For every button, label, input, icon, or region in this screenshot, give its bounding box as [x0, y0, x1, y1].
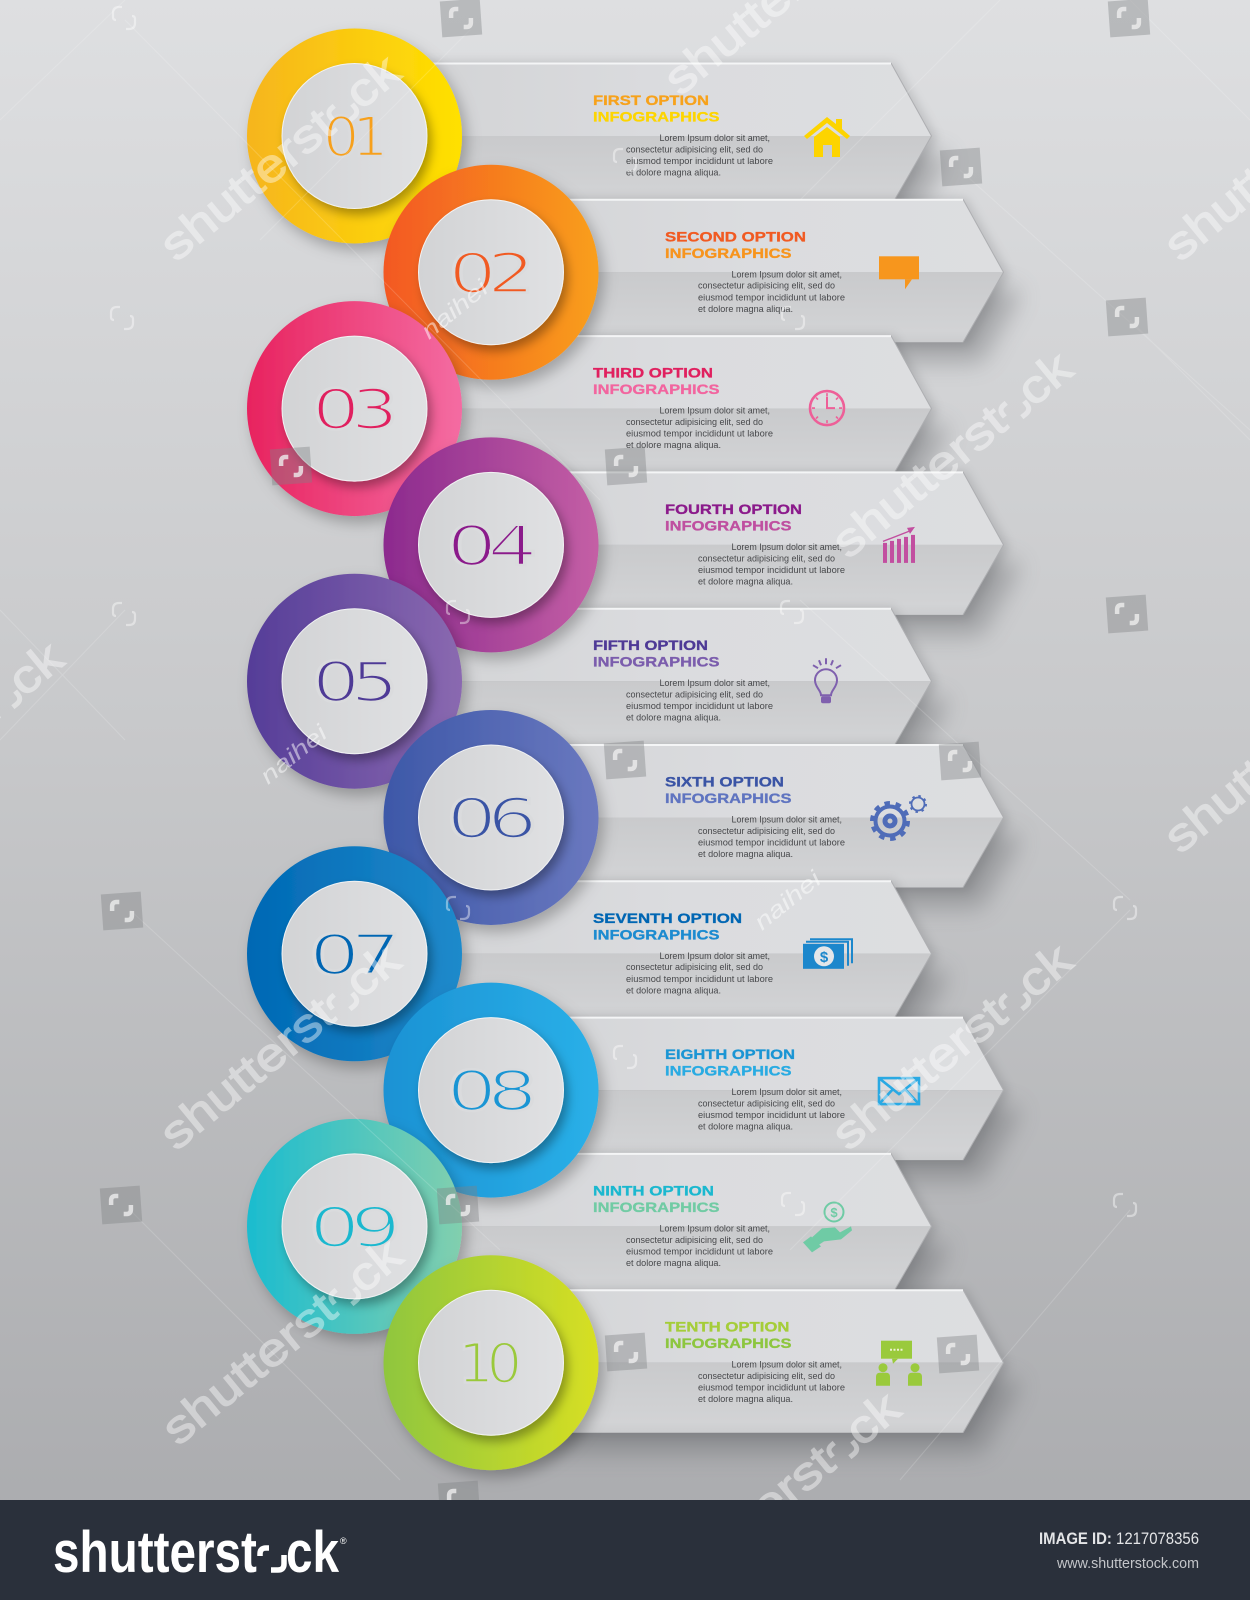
text block: option 4: consectetur adipisicing elit, sed do [698, 553, 835, 564]
badge: 07: 07 [309, 923, 395, 987]
text block: option 3: Lorem Ipsum dolor sit amet, [660, 406, 770, 417]
text block: option 3: et dolore magna aliqua. [626, 440, 721, 451]
watermark pattern: shutterstock [821, 340, 1082, 568]
badge: 01: 01 [323, 105, 383, 169]
text block: option 1 [626, 133, 773, 178]
text block: option 5: eiusmod tempor incididunt ut labore [626, 701, 773, 712]
watermark pattern: naihei [416, 274, 494, 344]
text block: option 8: et dolore magna aliqua. [698, 1122, 793, 1133]
text block: option 7: Lorem Ipsum dolor sit amet, [660, 951, 770, 962]
panel: option 8 arrow [502, 1016, 1021, 1180]
heading: option 1: FIRST OPTION [593, 93, 709, 108]
text block: option 9: consectetur adipisicing elit, sed do [626, 1235, 763, 1246]
icon: banknotes [803, 939, 852, 969]
heading: option 3 [593, 366, 720, 397]
heading: option 9: INFOGRAPHICS [593, 1200, 720, 1215]
text block: option 10: et dolore magna aliqua. [698, 1394, 793, 1405]
text block: option 3: consectetur adipisicing elit, sed do [626, 417, 763, 428]
text block: option 6: eiusmod tempor incididunt ut labore [698, 838, 845, 848]
text block: option 9: et dolore magna aliqua. [626, 1258, 721, 1269]
text block: option 3: eiusmod tempor incididunt ut labore [626, 429, 773, 440]
heading: option 7 [593, 911, 742, 942]
heading: option 8: EIGHTH OPTION [665, 1047, 795, 1062]
watermark pattern: shutterstock [149, 43, 410, 271]
heading: option 7: INFOGRAPHICS [593, 927, 720, 942]
icon: gears [872, 796, 926, 839]
text block: option 4 [698, 542, 845, 587]
text block: option 8: consectetur adipisicing elit, sed do [698, 1098, 835, 1109]
icon: hand with coin [803, 1202, 852, 1252]
text block: option 7: consectetur adipisicing elit, sed do [626, 962, 763, 973]
heading: option 9 [593, 1183, 720, 1215]
watermark pattern: naihei [255, 719, 333, 789]
footer image id and url [1039, 1530, 1199, 1572]
heading: option 4 [665, 502, 802, 533]
badge: 03 [247, 301, 462, 516]
text block: option 2: et dolore magna aliqua. [698, 304, 793, 315]
heading: option 6 [665, 774, 792, 806]
heading: option 1: INFOGRAPHICS [593, 110, 720, 124]
badge: 06 [384, 710, 598, 925]
heading: option 5: FIFTH OPTION [593, 638, 708, 653]
icon: hand with coin: $ [830, 1205, 838, 1220]
text block: option 9: Lorem Ipsum dolor sit amet, [660, 1223, 770, 1234]
heading: option 3: THIRD OPTION [593, 366, 713, 381]
badge: 09 [247, 1119, 462, 1334]
heading: option 1 [593, 93, 720, 124]
text block: option 10: Lorem Ipsum dolor sit amet, [732, 1360, 842, 1371]
icon: envelope [879, 1078, 919, 1104]
watermark pattern: shutterstock [149, 932, 410, 1160]
badge: 01 [247, 28, 462, 244]
icon: banknotes: $ [820, 949, 829, 966]
panel: option 7 arrow [430, 880, 949, 1044]
text block: option 4: eiusmod tempor incididunt ut labore [698, 565, 845, 576]
text block: option 5: consectetur adipisicing elit, sed do [626, 690, 763, 701]
heading: option 9: NINTH OPTION [593, 1183, 714, 1198]
heading: option 6: INFOGRAPHICS [665, 791, 792, 806]
text block: option 6: et dolore magna aliqua. [698, 849, 793, 860]
text block: option 9 [626, 1223, 773, 1269]
panel: option 6 arrow [502, 744, 1021, 908]
heading: option 8 [665, 1047, 795, 1079]
heading: option 2: INFOGRAPHICS [665, 246, 792, 261]
text block: option 7: eiusmod tempor incididunt ut labore [626, 974, 773, 985]
text block: option 1: consectetur adipisicing elit, sed do [626, 144, 763, 155]
text block: option 3 [626, 406, 773, 451]
text block: option 6 [698, 814, 845, 860]
heading: option 5: INFOGRAPHICS [593, 655, 720, 670]
text block: option 2: Lorem Ipsum dolor sit amet, [732, 269, 842, 280]
panel: option 1 arrow [430, 62, 949, 226]
watermark pattern: shutterstock [821, 932, 1082, 1160]
heading: option 4: INFOGRAPHICS [665, 518, 792, 533]
text block: option 10 [698, 1360, 845, 1405]
footer bar [0, 1500, 1250, 1600]
text block: option 5: et dolore magna aliqua. [626, 713, 721, 724]
text block: option 1: Lorem Ipsum dolor sit amet, [660, 133, 770, 144]
badge: 03: 03 [312, 378, 393, 442]
badge: 02 [384, 165, 598, 380]
badge: 04: 04 [446, 514, 533, 578]
watermark pattern: shutterstock [151, 1227, 412, 1455]
icon: two people talking [876, 1341, 922, 1386]
heading: option 5 [593, 638, 720, 670]
badge: 10 [384, 1255, 598, 1470]
footer logo: ® [340, 1536, 347, 1546]
heading: option 10 [665, 1320, 792, 1351]
badge: 10: 10 [458, 1332, 519, 1396]
panel: option 4 arrow [502, 471, 1021, 635]
heading: option 2 [665, 229, 806, 261]
text block: option 7 [626, 951, 773, 996]
text block: option 2 [698, 269, 845, 315]
text block: option 8: eiusmod tempor incididunt ut labore [698, 1110, 845, 1121]
icon: bar chart with arrow [883, 527, 915, 563]
heading: option 7: SEVENTH OPTION [593, 911, 742, 926]
text block: option 2: eiusmod tempor incididunt ut labore [698, 292, 845, 303]
icon: house [804, 117, 850, 157]
panel: option 5 arrow [430, 607, 949, 771]
heading: option 6: SIXTH OPTION [665, 774, 784, 790]
text block: option 1: eiusmod tempor incididunt ut labore [626, 156, 773, 167]
watermark pattern: naihei [749, 865, 827, 935]
heading: option 2: SECOND OPTION [665, 229, 806, 244]
badge: 05: 05 [312, 650, 393, 714]
heading: option 4: FOURTH OPTION [665, 502, 802, 517]
panel: option 9 arrow [430, 1152, 949, 1316]
text block: option 5: Lorem Ipsum dolor sit amet, [660, 678, 770, 689]
icon: light bulb [813, 658, 841, 703]
icon: clock [810, 391, 844, 425]
text block: option 1: et dolore magna aliqua. [626, 168, 721, 178]
footer logo: shutterstock [53, 1520, 340, 1585]
heading: option 8: INFOGRAPHICS [665, 1064, 792, 1079]
icon: speech bubble [879, 256, 919, 289]
text block: option 10: eiusmod tempor incididunt ut labore [698, 1383, 845, 1394]
heading: option 3: INFOGRAPHICS [593, 382, 720, 397]
text block: option 10: consectetur adipisicing elit, sed do [698, 1371, 835, 1382]
badge: 08 [384, 983, 598, 1198]
panel: option 2 arrow [502, 198, 1021, 362]
text block: option 4: Lorem Ipsum dolor sit amet, [732, 542, 842, 553]
text block: option 6: consectetur adipisicing elit, sed do [698, 826, 835, 837]
badge: 06: 06 [446, 786, 533, 850]
text block: option 4: et dolore magna aliqua. [698, 576, 793, 587]
badge: 07 [247, 846, 462, 1061]
text block: option 6: Lorem Ipsum dolor sit amet, [732, 814, 842, 826]
text block: option 8: Lorem Ipsum dolor sit amet, [732, 1087, 842, 1098]
heading: option 10: INFOGRAPHICS [665, 1336, 792, 1351]
text block: option 5 [626, 678, 773, 724]
badge: 02: 02 [448, 241, 528, 305]
text block: option 2: consectetur adipisicing elit, sed do [698, 281, 835, 292]
text block: option 8 [698, 1087, 845, 1133]
footer image id and url: IMAGE ID: 1217078356 [1039, 1530, 1199, 1548]
panel: option 10 arrow [502, 1289, 1021, 1453]
footer image id and url: www.shutterstock.com [1056, 1555, 1199, 1572]
badge: 05 [247, 574, 462, 789]
badge: 04 [384, 437, 598, 652]
text block: option 7: et dolore magna aliqua. [626, 985, 721, 996]
heading: option 10: TENTH OPTION [665, 1320, 790, 1335]
text block: option 9: eiusmod tempor incididunt ut labore [626, 1246, 773, 1257]
badge: 09: 09 [309, 1195, 397, 1259]
panel: option 3 arrow [430, 335, 949, 499]
badge: 08: 08 [446, 1059, 533, 1123]
